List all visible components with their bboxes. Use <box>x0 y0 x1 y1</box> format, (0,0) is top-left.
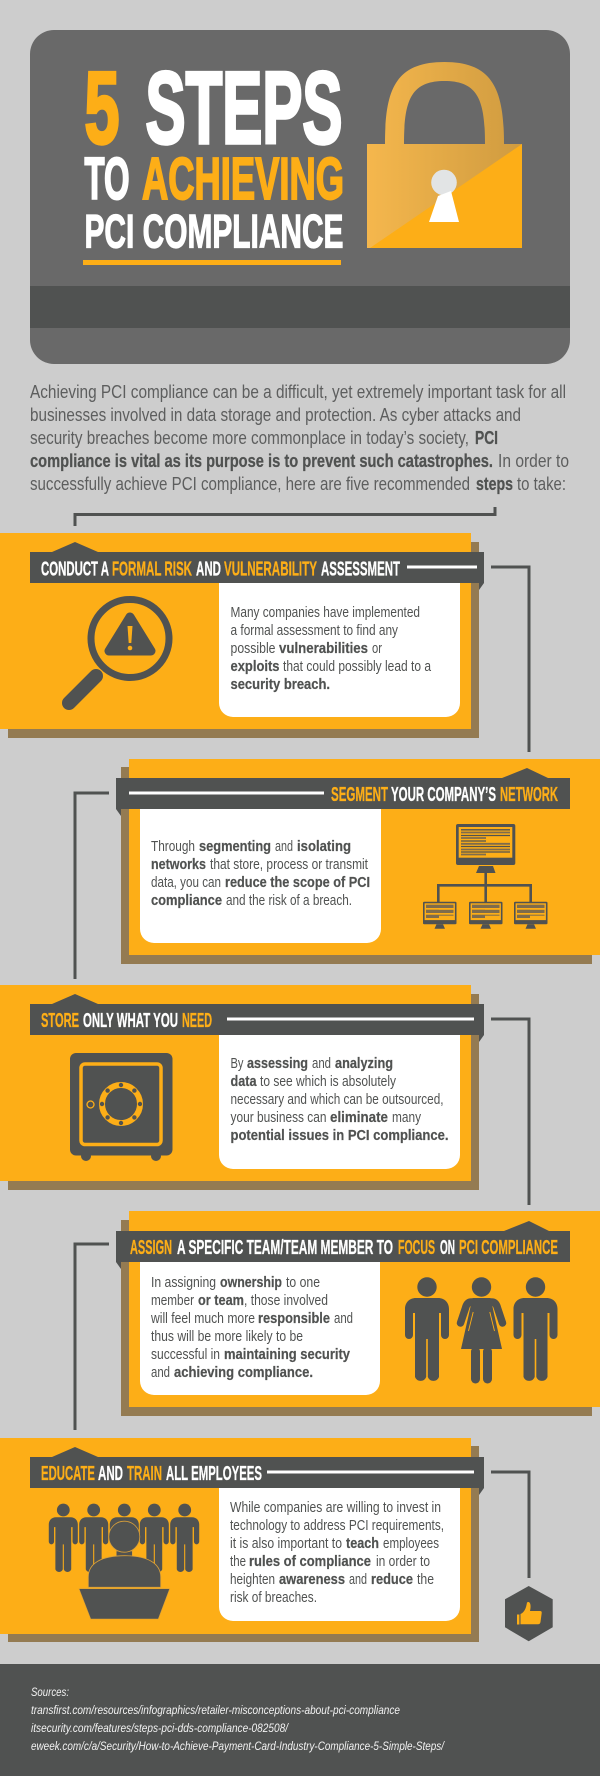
text card: step 3: potential issues in PCI compliance. <box>230 1128 448 1144</box>
text card: step 4: and <box>334 1311 353 1327</box>
heading: step 5: ALL EMPLOYEES <box>166 1463 262 1485</box>
title underline <box>83 260 341 265</box>
heading: step 5: AND <box>98 1463 123 1485</box>
text card: step 2: segmenting <box>199 839 271 855</box>
arrow: intro to step 1 <box>75 507 495 526</box>
heading: step 3: ONLY WHAT YOU <box>83 1010 178 1032</box>
panel: title header <box>30 30 570 364</box>
text card: step 3: analyzing <box>335 1056 393 1072</box>
heading: step 1: FORMAL RISK <box>112 558 192 580</box>
title: 5 steps to achieving PCI compliance <box>84 51 344 258</box>
text card: step 3: By <box>230 1056 244 1072</box>
text card: step 4: thus will be more likely to be <box>151 1329 303 1345</box>
panel: step 1 <box>0 533 484 738</box>
text card: step 4: and <box>151 1365 170 1381</box>
heading: step 3 <box>41 1010 212 1032</box>
panel: step 3 <box>0 985 484 1190</box>
icon: trainer with employees <box>49 1504 199 1619</box>
text card: step 1: exploits <box>230 659 280 675</box>
heading: step 1: AND <box>196 558 221 580</box>
text card: step 5: in order to <box>376 1554 430 1570</box>
text card: step 5: employees <box>383 1536 439 1552</box>
title: 5 steps to achieving PCI compliance: STEPS <box>146 51 342 165</box>
text card: step 1: security breach. <box>230 677 330 693</box>
text card: step 5: risk of breaches. <box>230 1590 317 1606</box>
arrow: step 3 to step 4 <box>491 1019 529 1205</box>
footer: sources: itsecurity.com/features/steps-pci-dds-compliance-082508/ <box>31 1721 289 1735</box>
title: 5 steps to achieving PCI compliance: TO <box>84 146 130 212</box>
title: 5 steps to achieving PCI compliance: ACHIEVING <box>142 146 344 212</box>
text card: step 4: to one <box>286 1275 320 1291</box>
text card: step 4: member <box>151 1293 194 1309</box>
text card: step 2: data, you can <box>151 875 221 891</box>
text card: step 5: reduce <box>371 1572 413 1588</box>
title: 5 steps to achieving PCI compliance: PCI COMPLIANCE <box>84 204 344 258</box>
heading: step 3: NEED <box>182 1010 212 1032</box>
text card: step 5: it is also important to <box>230 1536 342 1552</box>
arrow: step 2 to step 3 <box>75 793 109 979</box>
intro paragraph: successfully achieve PCI compliance, here are five recommended <box>30 474 470 494</box>
footer: sources: transfirst.com/resources/infographics/retailer-misconceptions-about-pci-compliance <box>31 1703 400 1717</box>
intro paragraph: steps <box>476 474 513 494</box>
text card: step 4: successful in <box>151 1347 220 1363</box>
text card: step 5: awareness <box>279 1572 345 1588</box>
heading: step 5: EDUCATE <box>41 1463 95 1485</box>
text card: step 3: many <box>392 1110 422 1126</box>
intro paragraph: In order to <box>498 451 569 471</box>
text card: step 5: While companies are willing to invest in <box>230 1500 441 1516</box>
panel: step 4 <box>116 1211 600 1416</box>
text card: step 5: heighten <box>230 1572 275 1588</box>
heading: step 1: CONDUCT A <box>41 558 109 580</box>
text card: step 2: and <box>275 839 293 855</box>
icon: team of three people <box>405 1277 558 1384</box>
text card: step 1: possible <box>230 641 276 657</box>
text card: step 3 <box>219 1035 460 1169</box>
text card: step 4: ownership <box>220 1275 282 1291</box>
intro paragraph <box>30 382 569 494</box>
text card: step 2: isolating <box>297 839 351 855</box>
text card: step 3: necessary and which can be outsourced, <box>230 1092 444 1108</box>
footer: sources: Sources: <box>31 1685 69 1699</box>
heading: step 4: ON <box>440 1237 455 1259</box>
heading: step 5: TRAIN <box>127 1463 162 1485</box>
panel: step 2 <box>116 759 600 964</box>
text card: step 5: rules of compliance <box>249 1554 371 1570</box>
heading: step 2: YOUR COMPANY’S <box>391 784 496 806</box>
heading: step 1: VULNERABILITY <box>224 558 317 580</box>
text card: step 1: Many companies have implemented <box>230 605 420 621</box>
title: 5 steps to achieving PCI compliance: 5 <box>84 51 120 165</box>
text card: step 2: networks <box>151 857 206 873</box>
heading: step 4: FOCUS <box>398 1237 435 1259</box>
intro paragraph: to take: <box>517 474 566 494</box>
icon: woman <box>460 1277 502 1384</box>
text card: step 1: that could possibly lead to a <box>283 659 432 675</box>
text card: step 2: reduce the scope of PCI <box>225 875 370 891</box>
text card: step 4: or team <box>198 1293 244 1309</box>
intro paragraph: compliance is vital as its purpose is to prevent such catastrophes. <box>30 451 493 471</box>
text card: step 3: your business can <box>230 1110 326 1126</box>
text card: step 1: a formal assessment to find any <box>230 623 399 639</box>
text card: step 4: responsible <box>258 1311 330 1327</box>
heading: step 3: STORE <box>41 1010 79 1032</box>
heading: step 5 <box>41 1463 262 1485</box>
text card: step 3: and <box>312 1056 331 1072</box>
text card: step 4 <box>140 1262 380 1395</box>
text card: step 3: data <box>230 1074 257 1090</box>
text card: step 5: the <box>417 1572 434 1588</box>
icon: network of monitors <box>423 824 548 929</box>
intro paragraph: businesses involved in data storage and protection. As cyber attacks and <box>30 405 521 425</box>
text card: step 2: Through <box>151 839 195 855</box>
text card: step 3: eliminate <box>330 1110 388 1126</box>
heading: step 2 <box>331 784 558 806</box>
text card: step 2: compliance <box>151 893 222 909</box>
text card: step 4: will feel much more <box>150 1311 255 1327</box>
heading: step 4: ASSIGN <box>130 1237 172 1259</box>
footer: sources <box>0 1664 600 1776</box>
intro paragraph: PCI <box>475 428 498 448</box>
arrow: step 4 to step 5 <box>75 1244 109 1430</box>
icon: padlock <box>367 62 522 248</box>
text card: step 5 <box>219 1488 460 1621</box>
icon: magnifier with warning <box>69 600 169 703</box>
text card: step 2: that store, process or transmit <box>210 857 368 873</box>
heading: step 2: SEGMENT <box>331 784 388 806</box>
text card: step 4: achieving compliance. <box>174 1365 313 1381</box>
footer: sources: eweek.com/c/a/Security/How-to-Achieve-Payment-Card-Industry-Compliance-5-Simple-Steps/ <box>31 1739 445 1753</box>
icon: thumbs up hexagon <box>505 1586 553 1641</box>
text card: step 5: the <box>230 1554 246 1570</box>
text card: step 1: or <box>372 641 382 657</box>
text card: step 4: , those involved <box>244 1293 328 1309</box>
arrow: step 5 to thumb <box>491 1472 529 1578</box>
panel: step 5 <box>0 1438 484 1642</box>
text card: step 5: and <box>349 1572 367 1588</box>
text card: step 4: maintaining security <box>224 1347 350 1363</box>
intro paragraph: security breaches become more commonplace in today’s society, <box>30 428 469 448</box>
heading: step 1: ASSESSMENT <box>321 558 400 580</box>
text card: step 1: vulnerabilities <box>279 641 368 657</box>
text card: step 1 <box>219 583 460 717</box>
arrow: step 1 to step 2 <box>491 567 529 752</box>
text card: step 3: to see which is absolutely <box>260 1074 397 1090</box>
heading: step 1 <box>41 558 400 580</box>
text card: step 4: In assigning <box>151 1275 216 1291</box>
text card: step 3: assessing <box>247 1056 308 1072</box>
text card: step 5: teach <box>346 1536 379 1552</box>
heading: step 4: A SPECIFIC TEAM/TEAM MEMBER TO <box>177 1237 393 1259</box>
text card: step 2: and the risk of a breach. <box>226 893 352 909</box>
icon: safe <box>70 1053 172 1161</box>
text card: step 2 <box>140 809 381 943</box>
text card: step 5: technology to address PCI requirements, <box>230 1518 444 1534</box>
